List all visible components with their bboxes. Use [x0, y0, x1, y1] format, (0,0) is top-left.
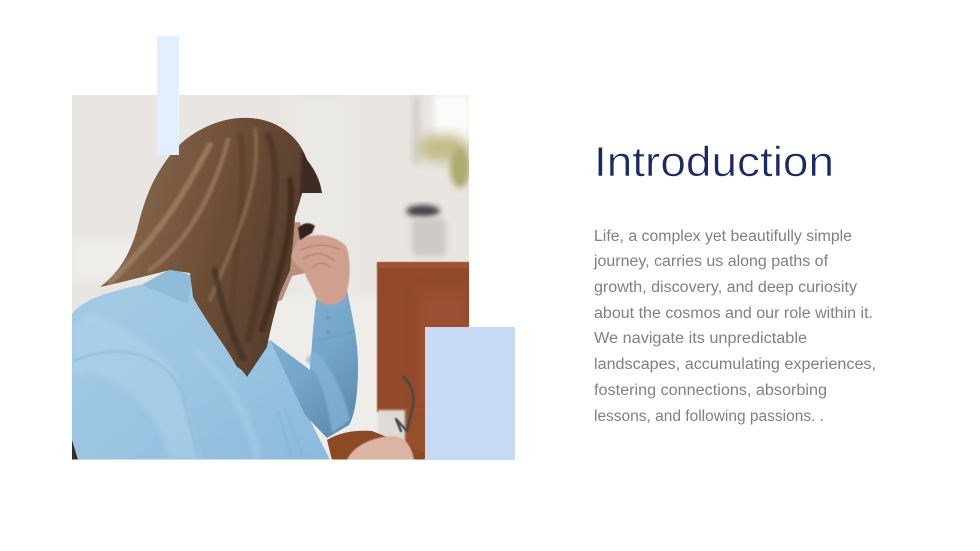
decorative pale blue vertical bar: [157, 36, 179, 155]
body paragraph: about the cosmos and our role within it.: [594, 305, 873, 322]
title: Introduction: [594, 138, 834, 185]
face in shadow: [278, 222, 306, 302]
body paragraph: We navigate its unpredictable: [594, 330, 807, 347]
hair: [100, 118, 322, 377]
body paragraph: landscapes, accumulating experiences,: [594, 356, 876, 373]
eyebrow and glasses at eye: [298, 223, 315, 240]
photo: woman pinching the bridge of her nose: [72, 95, 470, 460]
hand at nose: [291, 235, 350, 305]
decorative blue block: [425, 327, 515, 460]
shirt folds: [72, 312, 200, 460]
cuff buttons: [325, 315, 331, 321]
body paragraph: lessons, and following passions. .: [594, 408, 824, 425]
hand with glasses: [347, 436, 414, 460]
body paragraph: Life, a complex yet beautifully simple: [594, 228, 852, 245]
collar: [142, 268, 192, 304]
body paragraph: [593, 228, 876, 425]
body paragraph: fostering connections, absorbing: [594, 382, 827, 399]
forearm sleeve: [270, 290, 358, 438]
body paragraph: journey, carries us along paths of: [593, 253, 829, 270]
body paragraph: growth, discovery, and deep curiosity: [594, 279, 857, 296]
wooden armrest: [327, 431, 424, 460]
shirt torso: [72, 268, 330, 460]
